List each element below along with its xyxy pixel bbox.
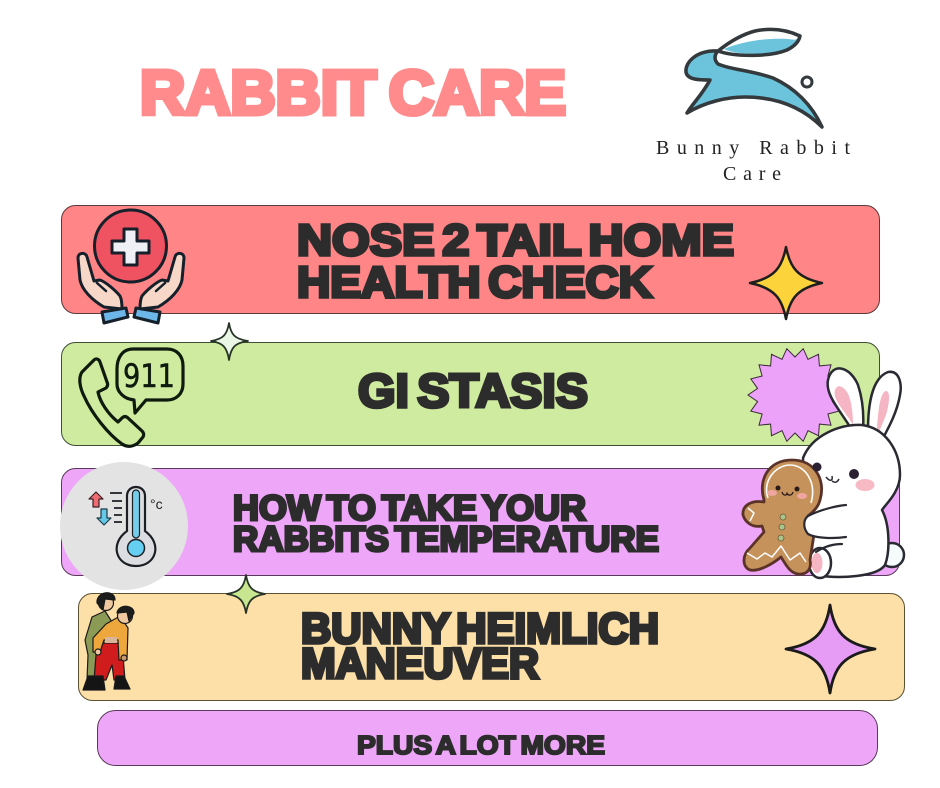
heading: how to take your rabbits temperature: RABBITS TEMPERATURE [233,520,659,559]
icon: purple sparkle [786,605,875,693]
logo wordmark: Bunny Rabbit [656,137,850,159]
heading: nose 2 tail home health check: NOSE 2 TAIL HOME [297,216,734,265]
icon: hands holding medical cross [78,210,184,323]
panel: home health check [62,206,880,319]
bunny [803,368,904,578]
heading: bunny heimlich maneuver: BUNNY HEIMLICH [301,605,659,653]
title: RABBIT CARE [140,59,566,128]
starburst badge [748,349,842,441]
logo: Bunny Rabbit Care [656,29,850,185]
icon: phone and 911 speech bubble: 911 [123,357,175,395]
illustration: bunny hugging gingerbread [743,368,904,578]
heading: how to take your rabbits temperature: HOW TO TAKE YOUR [233,489,586,528]
sparkle: green [227,575,265,613]
heading: GI stasis: GI STASIS [358,364,588,417]
bunny arm and near eye [804,462,848,552]
icon: thermometer in grey circle: °c [150,496,163,512]
logo wordmark: Care [723,163,781,185]
panel: Heimlich maneuver [78,594,904,700]
panel: GI stasis [62,342,880,446]
heading: bunny heimlich maneuver: MANEUVER [301,640,539,688]
sparkle: pale green [211,323,248,360]
heading: nose 2 tail home health check: HEALTH CHECK [297,258,652,307]
gingerbread man [743,460,822,574]
icon: phone and 911 speech bubble [80,349,183,446]
icon: yellow sparkle [750,247,822,319]
logo rabbit mark [686,29,822,127]
panel: plus a lot more [98,710,878,766]
icon: thermometer in grey circle [60,462,188,590]
icon: Heimlich figures [83,593,134,690]
heading: plus a lot more: PLUS A LOT MORE [357,730,605,760]
panel: take temperature [62,468,900,576]
